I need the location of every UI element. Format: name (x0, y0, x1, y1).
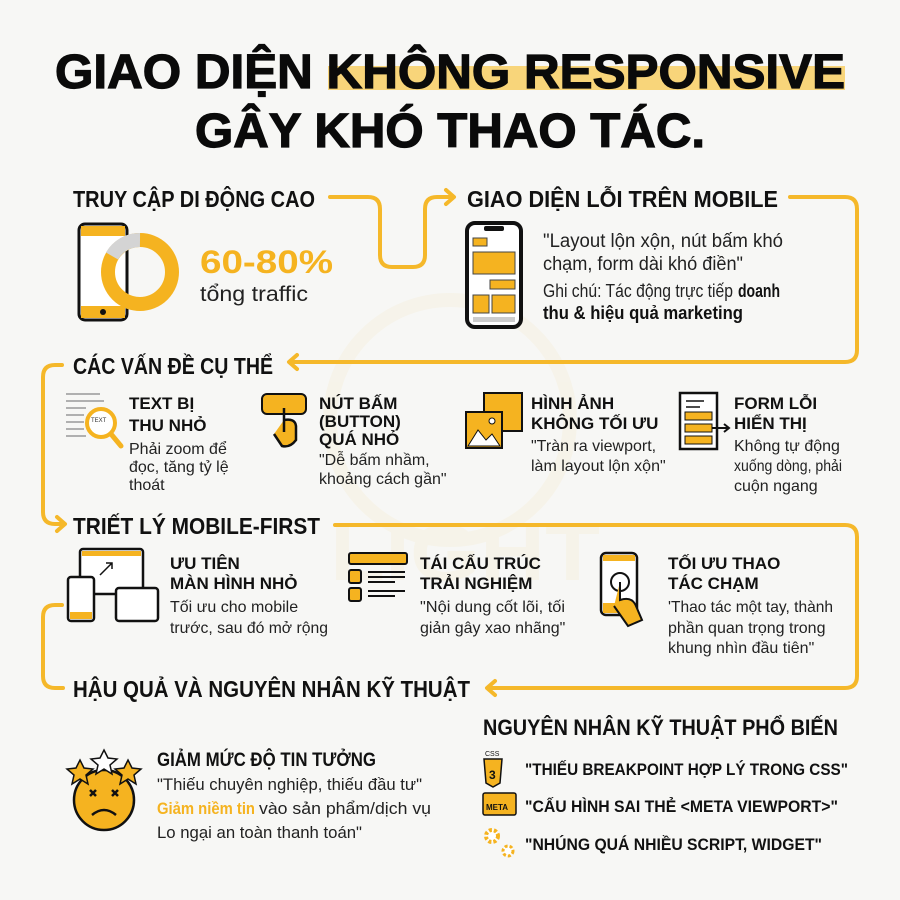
item: tai cau truc trai nghiem (349, 553, 565, 637)
heading: triet ly mobile-first: TRIẾT LÝ MOBILE-FIRST (73, 512, 320, 539)
item: text bi thu nho (66, 394, 229, 494)
item: uu tien man hinh nho: MÀN HÌNH NHỎ (170, 574, 298, 593)
cause list: "CẤU HÌNH SAI THẺ <META VIEWPORT>" (525, 797, 838, 816)
item: tai cau truc trai nghiem: "Nội dung cốt lõi, tối (420, 599, 565, 616)
cause list: 3 (489, 768, 496, 782)
heading: hau qua va nguyen nhan: HẬU QUẢ VÀ NGUYÊN NHÂN KỸ THUẬT (73, 674, 470, 702)
item: text bi thu nho: đọc, tăng tỷ lệ (129, 459, 229, 476)
title: GIAO DIỆN KHÔNG RESPONSIVE (55, 44, 845, 99)
item: form loi hien thi: FORM LỖI (734, 394, 817, 413)
heading: giao dien loi tren mobile: GIAO DIỆN LỖI TRÊN MOBILE (467, 184, 778, 212)
cause list (483, 751, 848, 856)
item: tai cau truc trai nghiem: TRẢI NGHIỆM (420, 574, 532, 593)
item: form loi hien thi: HIỂN THỊ (734, 414, 807, 433)
cause list: "NHÚNG QUÁ NHIỀU SCRIPT, WIDGET" (525, 835, 822, 854)
icon: stressed face (67, 750, 141, 830)
item: text bi thu nho: TEXT (91, 418, 107, 424)
heading: cac van de cu the: CÁC VẤN ĐỀ CỤ THỂ (73, 352, 273, 379)
text: layout quote and note (543, 231, 783, 323)
cause list: "THIẾU BREAKPOINT HỢP LÝ TRONG CSS" (525, 760, 848, 779)
item: hinh anh khong toi uu (466, 393, 666, 475)
item: nut bam qua nho: QUÁ NHỎ (319, 430, 399, 449)
item: form loi hien thi (680, 393, 842, 495)
icon: broken layout phone (467, 223, 521, 327)
item: toi uu thao tac cham (601, 553, 833, 657)
item: text bi thu nho: THU NHỎ (129, 416, 206, 435)
item: nut bam qua nho: khoảng cách gần" (319, 471, 447, 488)
item: tai cau truc trai nghiem: TÁI CẤU TRÚC (420, 554, 541, 573)
cause list: META (486, 803, 508, 812)
item: hinh anh khong toi uu: HÌNH ẢNH (531, 394, 614, 413)
item: nut bam qua nho (262, 394, 447, 488)
watermark: LIGHT (330, 508, 600, 597)
stat: 60-80%: 60-80% (200, 244, 333, 280)
item: toi uu thao tac cham: 'Thao tác một tay, thành (668, 599, 833, 616)
item: form loi hien thi: xuống dòng, phải (734, 458, 842, 475)
icon: phone with donut (79, 224, 172, 320)
cause list: CSS (485, 751, 500, 758)
item: uu tien man hinh nho: trước, sau đó mở rộng (170, 620, 328, 637)
item: text bi thu nho: thoát (129, 477, 165, 494)
item: text bi thu nho: TEXT BỊ (129, 394, 194, 413)
heading: truy cap di dong cao: TRUY CẬP DI ĐỘNG CAO (73, 185, 315, 212)
text: giam muc do tin tuong: GIẢM MỨC ĐỘ TIN TƯỞNG (157, 749, 376, 771)
item: form loi hien thi: Không tự động (734, 438, 840, 455)
item: nut bam qua nho: NÚT BẤM (319, 394, 397, 413)
item: toi uu thao tac cham: TỐI ƯU THAO (668, 553, 780, 573)
item: toi uu thao tac cham: khung nhìn đầu tiên" (668, 640, 814, 657)
item: uu tien man hinh nho: ƯU TIÊN (170, 554, 240, 573)
watermark (330, 300, 600, 597)
item: text bi thu nho: Phải zoom để (129, 440, 227, 458)
text: giam muc do tin tuong: Giảm niềm tin (157, 799, 255, 818)
item: hinh anh khong toi uu: KHÔNG TỐI ƯU (531, 413, 658, 433)
item: uu tien man hinh nho (68, 549, 328, 637)
text: layout quote and note: thu & hiệu quả marketing (543, 303, 743, 323)
text: giam muc do tin tuong: "Thiếu chuyên nghiệp, thiếu đầu tư" (157, 775, 422, 794)
text: layout quote and note: Ghi chú: Tác động trực tiếp (543, 281, 733, 301)
title: GÂY KHÓ THAO TÁC. (195, 103, 705, 158)
item: tai cau truc trai nghiem: giản gây xao nhãng" (420, 620, 565, 637)
item: toi uu thao tac cham: phần quan trọng trong (668, 620, 825, 637)
text: giam muc do tin tuong: Lo ngại an toàn thanh toán" (157, 823, 362, 842)
text: layout quote and note: doanh (738, 281, 780, 301)
text: layout quote and note: "Layout lộn xộn, nút bấm khó (543, 231, 783, 252)
text: giam muc do tin tuong: vào sản phẩm/dịch vụ (259, 799, 431, 818)
item: form loi hien thi: cuộn ngang (734, 478, 818, 495)
item: toi uu thao tac cham: TÁC CHẠM (668, 574, 759, 593)
heading: nguyen nhan ky thuat pho bien: NGUYÊN NHÂN KỸ THUẬT PHỔ BIẾN (483, 715, 838, 740)
item: uu tien man hinh nho: Tối ưu cho mobile (170, 599, 298, 616)
text: giam muc do tin tuong (157, 749, 431, 842)
stat: 60-80%: tổng traffic (200, 283, 308, 306)
title (55, 44, 845, 158)
item: nut bam qua nho: "Dễ bấm nhầm, (319, 450, 430, 469)
item: nut bam qua nho: (BUTTON) (319, 412, 401, 431)
item: hinh anh khong toi uu: làm layout lộn xộn" (531, 458, 666, 475)
text: layout quote and note: chạm, form dài khó điền" (543, 254, 743, 275)
item: hinh anh khong toi uu: "Tràn ra viewport, (531, 438, 656, 455)
connector arrows (43, 190, 857, 695)
stat: 60-80% (200, 244, 333, 306)
